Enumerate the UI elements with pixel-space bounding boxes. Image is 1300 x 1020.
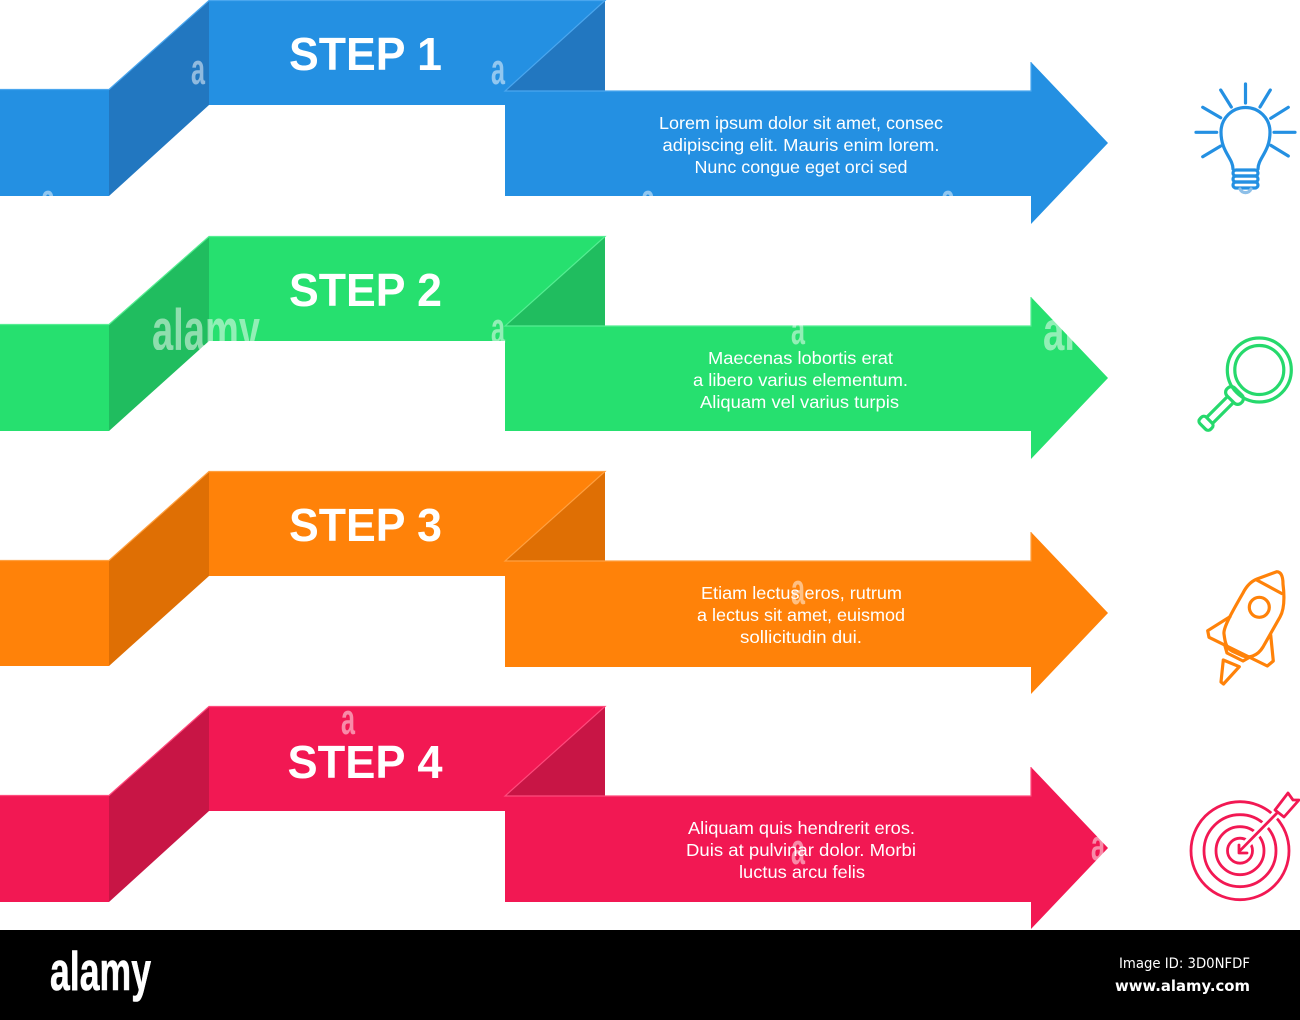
text block: step 3: Etiam lectus eros, rutrum (701, 583, 902, 603)
panel: step 2 ribbon (0, 236, 1108, 459)
text block: step 3: a lectus sit amet, euismod (697, 605, 905, 625)
heading: step 2: STEP 2 (289, 264, 442, 316)
text block: step 2: Maecenas lobortis erat (708, 348, 893, 368)
panel: step 4 ribbon (0, 706, 1108, 929)
watermark fragments: a (791, 565, 805, 614)
website: www.alamy.com (1115, 977, 1250, 995)
icon: magnifying glass (1198, 338, 1291, 432)
watermark fragments (41, 45, 1105, 874)
arrow (505, 62, 1108, 224)
fold triangle (505, 236, 605, 326)
watermark fragments: a (41, 175, 55, 224)
footer bar (0, 930, 1300, 1020)
heading: step 4: STEP 4 (288, 736, 443, 788)
watermark fragments: a (941, 175, 955, 224)
alamy logo: alamy (50, 940, 151, 1002)
folded side (109, 471, 209, 666)
heading: step 1: STEP 1 (289, 28, 442, 80)
arrow (505, 767, 1108, 929)
heading: step 3: STEP 3 (289, 499, 442, 551)
left ribbon block (0, 89, 109, 196)
heading band (209, 0, 605, 105)
text block: step 2: a libero varius elementum. (693, 370, 908, 390)
left ribbon block (0, 324, 109, 431)
text block: step 1 (659, 113, 943, 177)
text block: step 1: Lorem ipsum dolor sit amet, consec (659, 113, 943, 133)
left ribbon block (0, 795, 109, 902)
heading band (209, 236, 605, 341)
arrow (505, 297, 1108, 459)
text block: step 4: Duis at pulvinar dolor. Morbi (686, 840, 916, 860)
watermark fragments: a (491, 45, 505, 94)
heading band (209, 471, 605, 576)
watermark fragments: a (1091, 821, 1105, 870)
watermark fragments: a (191, 45, 205, 94)
watermark fragments: a (791, 305, 805, 354)
panel: step 3 ribbon (0, 471, 1108, 694)
text block: step 3: sollicitudin dui. (740, 627, 862, 647)
fold triangle (505, 0, 605, 91)
text block: step 1: Nunc congue eget orci sed (694, 157, 908, 177)
icon: rocket (1208, 572, 1284, 684)
watermark fragments: a (341, 695, 355, 744)
image id: Image ID: 3D0NFDF (1119, 956, 1250, 972)
watermark fragments: a (791, 825, 805, 874)
text block: step 4: luctus arcu felis (739, 862, 865, 882)
folded side (109, 706, 209, 902)
text block: step 1: adipiscing elit. Mauris enim lorem. (662, 135, 940, 155)
text block: step 2 (693, 348, 908, 412)
text block: step 3 (697, 583, 905, 647)
folded side (109, 0, 209, 196)
folded side (109, 236, 209, 431)
watermark fragments: alamy (152, 298, 260, 363)
watermark fragments: a (491, 304, 505, 353)
panel: step 1 ribbon (0, 0, 1108, 224)
icon: light bulb (1196, 84, 1295, 193)
arrow (505, 532, 1108, 694)
text block: step 4 (686, 818, 916, 882)
fold triangle (505, 706, 605, 796)
left ribbon block (0, 560, 109, 666)
icon: target with arrow (1191, 793, 1299, 900)
watermark fragments: a (641, 175, 655, 224)
text block: step 2: Aliquam vel varius turpis (700, 392, 899, 412)
fold triangle (505, 471, 605, 561)
text block: step 4: Aliquam quis hendrerit eros. (688, 818, 915, 838)
heading band (209, 706, 605, 811)
watermark fragments: al (1043, 299, 1075, 362)
